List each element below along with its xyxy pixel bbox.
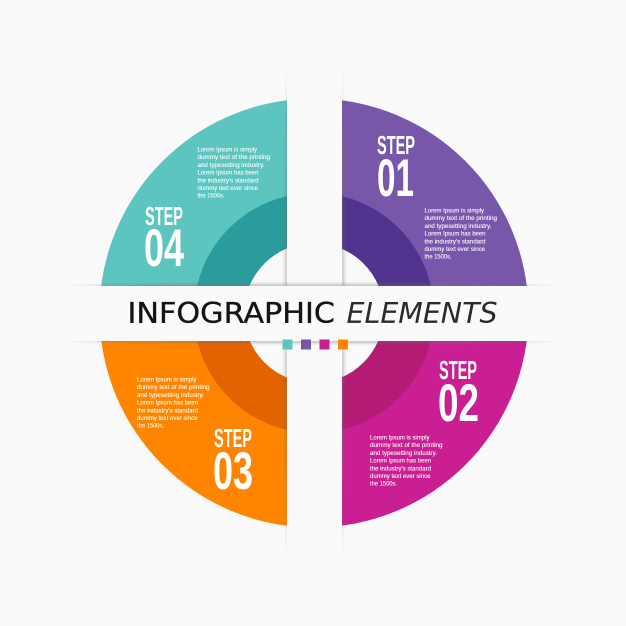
step 01 text (424, 208, 497, 261)
step 02 text: the 1500s. (370, 481, 397, 488)
step 04 text (198, 146, 270, 200)
step 03 text: Lorem Ipsum has been (137, 400, 198, 407)
step 03 text (137, 376, 210, 430)
step 03 text: the 1500s. (137, 423, 164, 430)
step 01 text: and typesetting industry. (424, 223, 492, 230)
step 01 text: the industry's standard (424, 238, 486, 245)
step 03 label: 03 (213, 442, 253, 501)
step 02 text: Lorem Ipsum is simply (370, 434, 430, 442)
step 03 text: dummy text of the printing (137, 384, 210, 391)
step 02 text: dummy text ever since (370, 473, 431, 480)
legend squares (282, 340, 348, 350)
step 01 label: 01 (377, 149, 414, 208)
vertical band shadows (284, 68, 344, 560)
step 02 text: the industry's standard (370, 465, 431, 472)
step 03 text: the industry's standard (137, 407, 198, 414)
step 02 text: Lorem Ipsum has been (370, 458, 431, 465)
step 04 text: the industry's standard (198, 177, 259, 184)
step 02 label: 02 (438, 374, 479, 433)
step 03 label: STEP (214, 423, 252, 453)
step 01 text: dummy text of the printing (424, 215, 497, 222)
step 04 text: and typesetting industry. (198, 162, 265, 169)
step 01 text: Lorem Ipsum is simply (424, 208, 485, 214)
step 01 text: dummy text ever since (424, 246, 485, 253)
step 04 text: Lorem Ipsum has been (198, 170, 259, 177)
step 02 text: and typesetting industry. (370, 450, 437, 457)
step 04 label (144, 201, 184, 278)
horizontal band shadows (62, 284, 562, 344)
step 01 text: the 1500s. (424, 254, 452, 261)
panel: step 01 purple quadrant (342, 100, 527, 286)
step 01 text: Lorem Ipsum has been (424, 231, 486, 238)
title: INFOGRAPHIC (128, 296, 335, 330)
step 04 label: 04 (144, 219, 184, 278)
vertical white band (287, 50, 342, 580)
step 02 label (438, 355, 479, 433)
step 03 text: and typesetting industry. (137, 392, 204, 399)
step 03 text: Lorem Ipsum is simply (137, 376, 197, 384)
step 04 label: STEP (145, 201, 183, 231)
step 02 text: dummy text of the printing (370, 442, 443, 449)
step 02 label: STEP (439, 355, 477, 385)
step 01 label: STEP (377, 130, 415, 160)
title (128, 296, 498, 330)
step 04 text: the 1500s. (198, 193, 225, 200)
panel: step 02 magenta quadrant (342, 341, 527, 526)
step 04 text: Lorem Ipsum is simply (198, 146, 258, 154)
panel: step 04 teal quadrant (101, 100, 287, 286)
horizontal title band (40, 286, 586, 341)
step 03 text: dummy text ever since (137, 415, 198, 422)
step 04 text: dummy text ever since (198, 185, 258, 192)
step 04 text: dummy text of the printing (198, 154, 270, 161)
step 01 label (377, 130, 415, 208)
title: ELEMENTS (346, 296, 498, 330)
step 03 label (213, 423, 253, 501)
panel: step 03 orange quadrant (101, 341, 287, 526)
step 02 text (370, 434, 443, 488)
